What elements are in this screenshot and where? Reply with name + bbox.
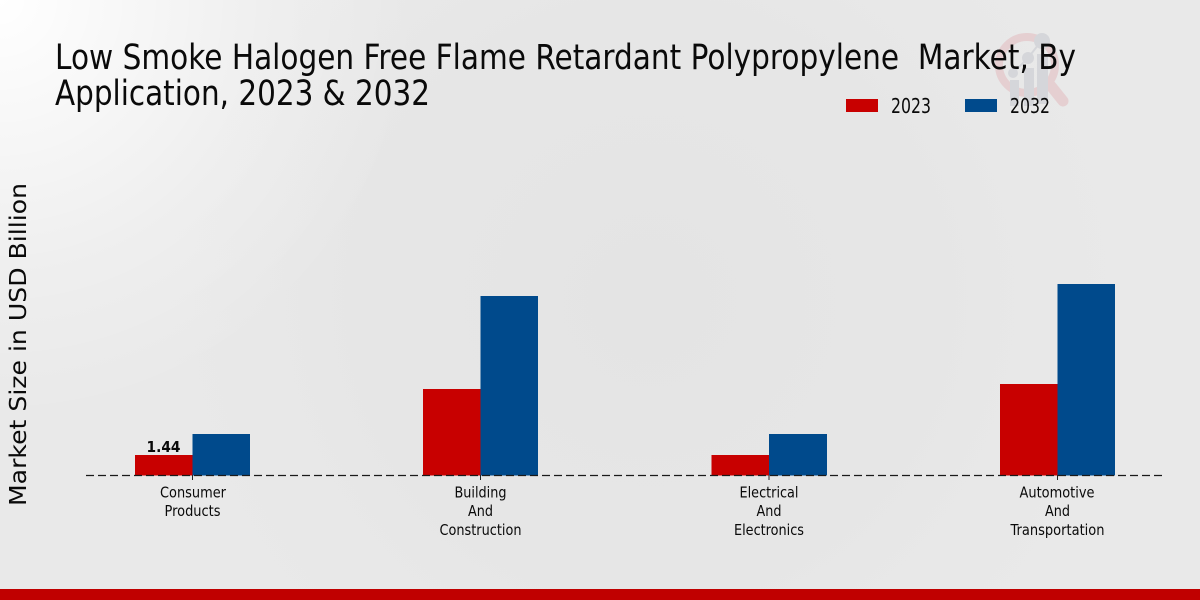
x-axis labels: Consumer <box>160 484 227 502</box>
x-axis labels: Transportation <box>1010 521 1104 539</box>
x-axis labels: Electrical <box>740 484 798 502</box>
legend: 2032 <box>1010 94 1050 118</box>
legend <box>846 94 1050 118</box>
x-axis labels: And <box>756 502 782 520</box>
x-axis labels: And <box>1045 502 1070 520</box>
title <box>55 38 1076 114</box>
group: Automotive And Transportation <box>1000 284 1115 476</box>
group: Building And Construction <box>423 296 538 476</box>
x-axis labels: And <box>468 502 493 520</box>
x-axis labels: Construction <box>440 521 522 539</box>
x-axis labels: Electronics <box>734 521 804 539</box>
group: Consumer Products: 1.44 <box>146 438 180 456</box>
footer bar <box>0 589 1200 600</box>
x-axis labels <box>160 484 1104 539</box>
group: Electrical And Electronics <box>712 434 827 476</box>
bar chart <box>86 284 1164 480</box>
legend: 2023 <box>891 94 931 118</box>
icon: watermark magnifier logo <box>999 33 1063 106</box>
x-axis labels: Automotive <box>1020 484 1094 502</box>
title: Application, 2023 & 2032 <box>55 74 430 114</box>
x-axis labels: Products <box>164 502 220 520</box>
y-axis label: Market Size in USD Billion <box>4 183 32 506</box>
x-axis labels: Building <box>454 484 506 502</box>
group: Consumer Products <box>135 434 250 476</box>
